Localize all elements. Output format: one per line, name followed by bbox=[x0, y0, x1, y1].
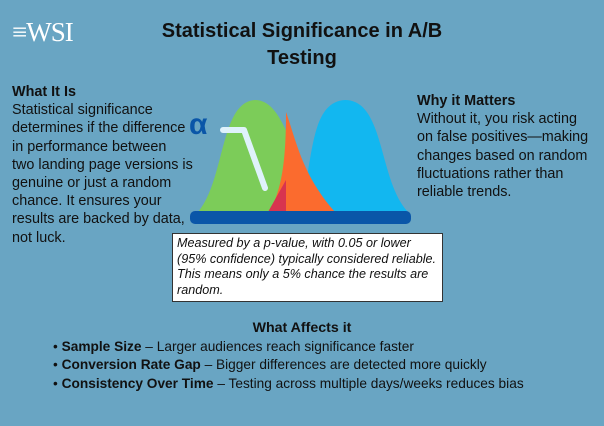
pointer line bbox=[223, 130, 265, 188]
text block: what it is: not luck. bbox=[12, 230, 66, 246]
bullet list: • Conversion Rate Gap – Bigger differences are detected more quickly bbox=[53, 357, 487, 372]
callout: p-value: Measured by a p-value, with 0.05 or lower bbox=[177, 236, 411, 250]
text block: what it is: in performance between bbox=[12, 139, 166, 155]
blue curve bbox=[296, 100, 408, 212]
title: Testing bbox=[267, 47, 337, 69]
green curve bbox=[198, 100, 335, 212]
icon: alpha: α bbox=[189, 108, 208, 141]
text block: what it is: determines if the difference bbox=[12, 120, 185, 136]
text block: what it is: Statistical significance bbox=[12, 102, 153, 118]
text block: what it is: chance. It ensures your bbox=[12, 193, 162, 209]
bullet list bbox=[53, 339, 524, 391]
text block: what it is: genuine or just a random bbox=[12, 175, 171, 191]
text block: why it matters: changes based on random bbox=[417, 148, 587, 164]
text block: what it is: results are backed by data, bbox=[12, 211, 185, 227]
text block: what it is bbox=[12, 84, 193, 246]
text block: why it matters: reliable trends. bbox=[417, 184, 511, 200]
title: Statistical Significance in A/B bbox=[162, 20, 442, 42]
base bar bbox=[190, 211, 411, 224]
text block: what it is: two landing page versions is bbox=[12, 157, 193, 173]
text block: what it is: What It Is bbox=[12, 84, 76, 100]
text block: why it matters bbox=[417, 93, 588, 200]
text block: why it matters: fluctuations rather than bbox=[417, 166, 563, 182]
text block: why it matters: Without it, you risk acting bbox=[417, 111, 577, 127]
text block: why it matters: on false positives—making bbox=[417, 129, 588, 145]
callout: p-value bbox=[172, 233, 443, 302]
heading: what affects it: What Affects it bbox=[253, 320, 351, 336]
callout: p-value: This means only a 5% chance the results are bbox=[177, 267, 428, 281]
bullet list: • Sample Size – Larger audiences reach significance faster bbox=[53, 339, 414, 354]
text block: why it matters: Why it Matters bbox=[417, 93, 515, 109]
callout: p-value: random. bbox=[177, 282, 223, 296]
orange overlap bbox=[268, 112, 335, 212]
bullet list: • Consistency Over Time – Testing across multiple days/weeks reduces bias bbox=[53, 376, 524, 391]
callout: p-value: (95% confidence) typically considered reliable. bbox=[177, 252, 436, 266]
title bbox=[162, 20, 442, 69]
chart: bell curves bbox=[189, 100, 411, 224]
logo: WSI: ≡WSI bbox=[12, 17, 73, 47]
